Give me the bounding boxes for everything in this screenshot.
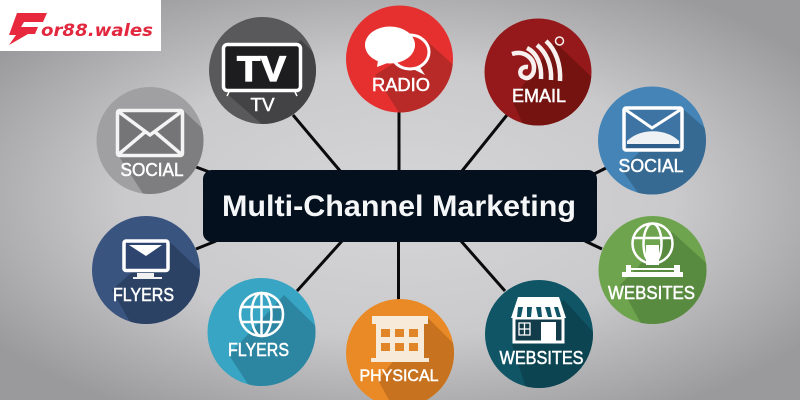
icon: globe xyxy=(240,293,283,336)
node: TV xyxy=(209,17,316,124)
node: Radio xyxy=(346,6,453,112)
node: Websites teal: WEBSITES xyxy=(500,348,584,368)
node: Websites green: WEBSITES xyxy=(608,283,695,303)
logo icon xyxy=(9,13,47,45)
connector lines xyxy=(196,110,608,302)
node: Social gray xyxy=(96,87,204,194)
icon: speech bubbles xyxy=(365,26,429,75)
node: Email: EMAIL xyxy=(512,86,566,106)
logo text: or88.wales xyxy=(41,21,153,41)
logo xyxy=(0,0,161,51)
node: Physical xyxy=(346,299,454,400)
node: Flyers navy xyxy=(92,216,200,324)
node: Social blue: SOCIAL xyxy=(618,156,684,176)
icon: envelope open xyxy=(624,108,682,150)
node: Social blue xyxy=(598,86,706,194)
icon: TV: TV xyxy=(237,50,287,89)
node: Flyers teal xyxy=(208,278,316,386)
title: Multi-Channel Marketing xyxy=(222,190,576,223)
node: Physical: PHYSICAL xyxy=(360,366,438,385)
icon: envelope xyxy=(118,110,182,156)
icon: monitor xyxy=(124,241,168,279)
node: Flyers navy: FLYERS xyxy=(113,285,174,305)
node: Websites teal xyxy=(485,280,593,388)
icon: signal waves xyxy=(512,37,564,81)
node: Radio: RADIO xyxy=(372,75,430,95)
icon: building xyxy=(371,316,429,362)
node: Social gray: SOCIAL xyxy=(120,160,184,180)
central title panel xyxy=(203,170,597,242)
node: Flyers teal: FLYERS xyxy=(228,340,289,360)
node: TV: TV xyxy=(250,95,274,115)
node: Websites green xyxy=(598,216,706,324)
icon: globe on network bar xyxy=(622,224,683,277)
icon: storefront xyxy=(511,297,566,342)
node: Email xyxy=(484,18,592,126)
